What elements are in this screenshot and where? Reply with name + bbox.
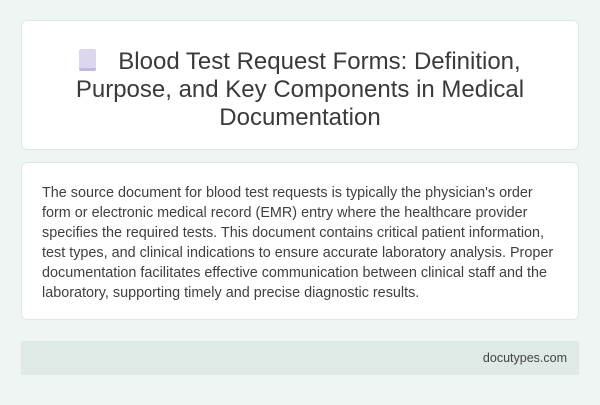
title: Blood Test Request Forms: Definition, bbox=[118, 48, 521, 75]
panel: title card bbox=[21, 20, 579, 150]
panel: description card bbox=[21, 162, 579, 320]
footer: docutypes.com bbox=[483, 351, 567, 365]
title: Documentation bbox=[219, 104, 381, 131]
icon: document bbox=[79, 49, 96, 71]
title: Purpose, and Key Components in Medical bbox=[76, 76, 524, 103]
footer bbox=[21, 341, 579, 375]
title bbox=[76, 48, 524, 131]
text block: The source document for blood test requests is typically the physician's order form or electronic medical record (EMR) entry where the healthcare provider specifies the required tests. This document contains critical patient information, test types, and clinical indications to ensure accurate laboratory analysis. Proper documentation facilitates effective communication between clinical staff and the laboratory, supporting timely and precise diagnostic results. bbox=[42, 185, 553, 301]
